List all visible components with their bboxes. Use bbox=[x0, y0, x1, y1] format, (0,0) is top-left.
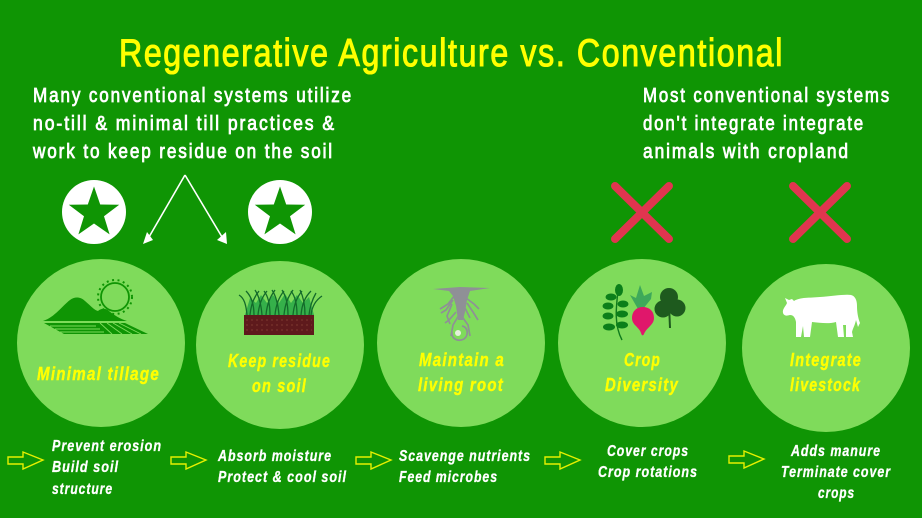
label: living root bbox=[418, 375, 504, 395]
text block: conventional livestock note bbox=[643, 85, 891, 163]
arrow 1 bbox=[8, 452, 43, 469]
icon: star badge left bbox=[62, 180, 126, 244]
text block: conventional tillage note: work to keep residue on the soil bbox=[32, 141, 334, 163]
text block: livestock benefits: crops bbox=[818, 485, 855, 502]
text block: crop diversity practices: Crop rotations bbox=[598, 464, 698, 481]
text block: residue benefits: Protect & cool soil bbox=[218, 469, 347, 486]
panel: integrate livestock bbox=[742, 264, 910, 432]
text block: livestock benefits bbox=[781, 443, 891, 502]
title: Regenerative Agriculture vs. Conventional bbox=[119, 32, 784, 75]
icon: red cross right bbox=[793, 186, 847, 239]
text block: conventional tillage note bbox=[32, 85, 353, 163]
text block: conventional tillage note: no-till & minimal till practices & bbox=[33, 113, 336, 135]
label: Crop bbox=[624, 350, 661, 370]
arrow 4 bbox=[545, 452, 580, 469]
label: Keep residue bbox=[228, 351, 331, 371]
text block: living root benefits: Scavenge nutrients bbox=[399, 448, 531, 465]
icon: root bbox=[433, 287, 490, 340]
label: Minimal tillage bbox=[37, 364, 160, 384]
panel: crop diversity bbox=[558, 259, 726, 427]
text block: crop diversity practices bbox=[598, 443, 698, 481]
panel: maintain a living root bbox=[377, 259, 545, 427]
text block: minimal tillage benefits: structure bbox=[52, 481, 113, 498]
text block: livestock benefits: Adds manure bbox=[790, 443, 881, 460]
text block: residue benefits: Absorb moisture bbox=[217, 448, 332, 465]
label: on soil bbox=[252, 376, 307, 396]
label: livestock bbox=[790, 375, 861, 395]
arrow 2 bbox=[171, 452, 206, 469]
text block: conventional tillage note: Many conventional systems utilize bbox=[33, 85, 353, 107]
arrow 3 bbox=[356, 452, 391, 469]
text block: minimal tillage benefits: Prevent erosion bbox=[52, 438, 162, 455]
text block: conventional livestock note: animals with cropland bbox=[643, 141, 850, 163]
arrow 5 bbox=[729, 451, 764, 468]
text block: conventional livestock note: don't integrate integrate bbox=[643, 113, 865, 135]
panel: minimal tillage bbox=[17, 259, 185, 427]
label: Integrate bbox=[790, 350, 862, 370]
text block: living root benefits bbox=[399, 448, 531, 486]
panel: keep residue on soil bbox=[196, 261, 364, 429]
text block: livestock benefits: Terminate cover bbox=[781, 464, 891, 481]
text block: minimal tillage benefits bbox=[52, 438, 162, 498]
label bbox=[605, 350, 679, 395]
arrows: from note to the two practices bbox=[143, 175, 227, 244]
label bbox=[418, 350, 505, 395]
icon: grass over soil block bbox=[239, 290, 322, 335]
icon: fern, radish and clover bbox=[602, 284, 686, 340]
label: Maintain a bbox=[419, 350, 505, 370]
icon: star badge right bbox=[248, 180, 312, 244]
icon: red cross left bbox=[615, 186, 669, 239]
label bbox=[228, 351, 331, 396]
text block: minimal tillage benefits: Build soil bbox=[52, 459, 119, 476]
text block: crop diversity practices: Cover crops bbox=[607, 443, 689, 460]
icon: cow bbox=[783, 295, 860, 337]
text block: living root benefits: Feed microbes bbox=[399, 469, 498, 486]
text block: residue benefits bbox=[217, 448, 347, 486]
label: Diversity bbox=[605, 375, 679, 395]
icon: hills, sun and fields bbox=[43, 280, 148, 334]
label bbox=[790, 350, 862, 395]
